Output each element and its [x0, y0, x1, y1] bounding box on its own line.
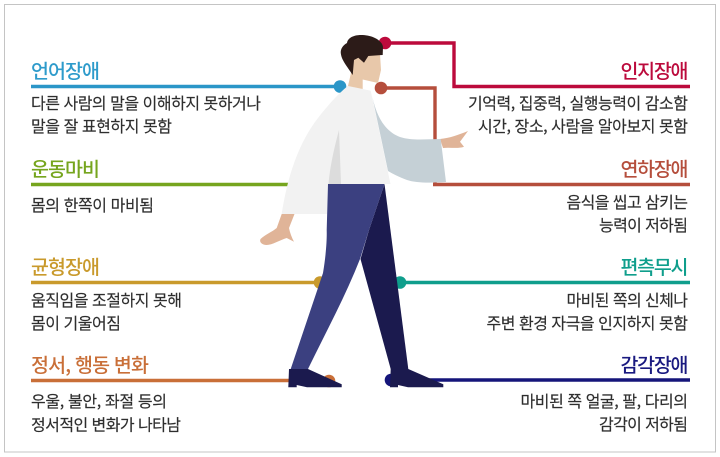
text: 언어장애 description: 말을 잘 표현하지 못함: [31, 113, 172, 137]
front leg: [291, 184, 384, 369]
connector line and dot: 인지장애: [379, 37, 690, 86]
text: 인지장애 description: 시간, 장소, 사람을 알아보지 못함: [478, 113, 688, 137]
left hand: [260, 214, 294, 245]
heading: 운동마비: 운동마비: [31, 153, 100, 182]
panel: 편측무시: [394, 251, 690, 334]
heading: 편측무시: 편측무시: [620, 251, 688, 280]
text: 감각장애 description: [520, 388, 688, 435]
connector line and dot: 편측무시: [394, 276, 690, 289]
text: 균형장애 description: [31, 287, 182, 334]
panel: 운동마비: [31, 153, 292, 216]
neck and face: [348, 54, 381, 89]
text: 인지장애 description: 기억력, 집중력, 실행능력이 감소함: [468, 90, 688, 114]
connector line and dot: 균형장애: [31, 276, 326, 289]
text: 편측무시 description: 마비된 쪽의 신체나: [566, 287, 688, 311]
text: 운동마비 description: 몸의 한쪽이 마비됨: [31, 192, 154, 216]
text: 연하장애 description: 능력이 저하됨: [599, 212, 688, 236]
hair: [341, 35, 383, 75]
text: 언어장애 description: [31, 90, 261, 137]
panel: 감각장애: [385, 349, 690, 435]
connector line: 운동마비: [31, 183, 292, 186]
right sleeve: [372, 94, 446, 183]
text: 정서, 행동 변화 description: 우울, 불안, 좌절 등의: [31, 388, 167, 412]
heading: 균형장애: 균형장애: [31, 251, 100, 280]
text: 인지장애 description: [468, 90, 688, 137]
text: 정서, 행동 변화 description: 정서적인 변화가 나타남: [31, 412, 181, 436]
illustration: walking person: [260, 35, 468, 387]
connector line and dot: 감각장애: [385, 374, 690, 386]
text: 연하장애 description: 음식을 씹고 삼키는: [566, 189, 688, 213]
text: 연하장애 description: [566, 189, 688, 236]
heading: 인지장애: 인지장애: [620, 55, 688, 84]
panel: 인지장애: [379, 37, 690, 137]
shirt shadow: [328, 130, 341, 184]
panel: 균형장애: [31, 251, 326, 334]
front shoe: [288, 369, 342, 387]
connector line and dot: 연하장애: [375, 82, 690, 184]
panel: 정서, 행동 변화: [31, 349, 335, 436]
text: 정서, 행동 변화 description: [31, 388, 181, 436]
text: 균형장애 description: 몸이 기울어짐: [31, 310, 121, 334]
connector line and dot: 언어장애: [31, 80, 346, 93]
text: 언어장애 description: 다른 사람의 말을 이해하지 못하거나: [31, 90, 261, 114]
back leg: [360, 184, 408, 369]
heading: 정서, 행동 변화: 정서, 행동 변화: [31, 349, 149, 378]
text: 감각장애 description: 마비된 쪽 얼굴, 팔, 다리의: [520, 388, 688, 412]
right hand: [440, 131, 468, 148]
text: 감각장애 description: 감각이 저하됨: [599, 411, 688, 435]
heading: 언어장애: 언어장애: [31, 55, 100, 84]
panel: 언어장애: [31, 55, 346, 137]
shirt: [282, 86, 390, 214]
panel: 연하장애: [375, 82, 690, 236]
text: 편측무시 description: [486, 287, 688, 334]
connector line and dot: 정서, 행동 변화: [31, 375, 335, 387]
text: 편측무시 description: 주변 환경 자극을 인지하지 못함: [486, 310, 688, 334]
heading: 연하장애: 연하장애: [620, 153, 688, 182]
text: 균형장애 description: 움직임을 조절하지 못해: [31, 287, 182, 311]
heading: 감각장애: 감각장애: [620, 349, 688, 378]
back shoe: [390, 369, 443, 387]
